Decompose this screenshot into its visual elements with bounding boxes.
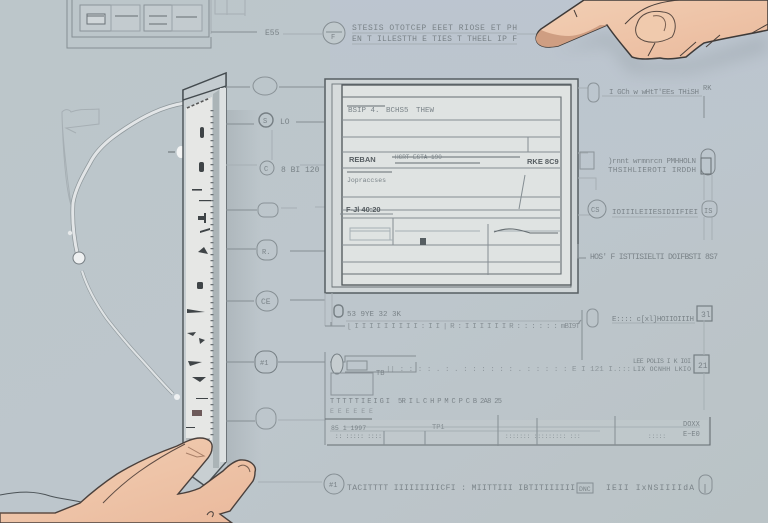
connector callouts between ruler and form: #1 bbox=[260, 360, 268, 368]
connector callouts between ruler and form bbox=[226, 77, 344, 494]
connector callouts between ruler and form: #1 bbox=[329, 482, 337, 490]
right callouts: IS bbox=[704, 208, 712, 216]
panel: top left wireframe bbox=[67, 0, 245, 48]
panel: central form: BCHS5 bbox=[386, 107, 409, 115]
connector callouts between ruler and form: 8 BI 120 bbox=[281, 166, 320, 175]
lower rows: 3l bbox=[701, 311, 711, 320]
connector callouts between ruler and form: CE bbox=[261, 298, 271, 307]
bottom table: E E E E E E bbox=[330, 408, 373, 415]
right callouts: CS bbox=[591, 207, 599, 215]
connector callouts between ruler and form: R. bbox=[262, 249, 270, 257]
curve with nodes bbox=[62, 103, 191, 400]
bottom table: TP1 bbox=[432, 424, 445, 432]
connector callouts between ruler and form: LO bbox=[280, 118, 290, 127]
bottom table bbox=[325, 398, 710, 446]
right callouts bbox=[578, 83, 718, 262]
top callout row bbox=[211, 22, 536, 44]
panel: central form: Jopraccses bbox=[347, 177, 386, 184]
text: TB bbox=[376, 370, 384, 378]
top callout row: F bbox=[331, 34, 335, 42]
ruler bbox=[183, 73, 226, 486]
right callouts: I GCh w wHtT'EEs THiSH bbox=[609, 89, 699, 97]
bottom text row bbox=[347, 475, 712, 494]
right callouts: HOS' F ISTTISIELTI DOIFBSTI 8S7 bbox=[590, 253, 718, 262]
bottom text row: DNC bbox=[579, 486, 591, 493]
right callouts: THSIHLIEROTI IRDDH bbox=[608, 167, 696, 175]
form rows bbox=[342, 97, 560, 274]
bottom text row: TACITTTT IIIIIIIIICFI : MIITTIII IBTITIIIIII bbox=[347, 484, 575, 493]
top callout row: EN T ILLESTTH E TIES T THEEL IP F bbox=[352, 35, 517, 44]
lower rows: 53 9YE 32 3K bbox=[347, 311, 402, 319]
icon: top right hand bbox=[536, 0, 768, 72]
panel: central form: THEW bbox=[416, 107, 435, 115]
bottom table: :: ::::: :::: bbox=[335, 433, 382, 440]
right callouts: RK bbox=[703, 85, 712, 93]
ruler ticks bbox=[210, 110, 214, 440]
bottom table: DOXX bbox=[683, 421, 701, 429]
top callout row: E55 bbox=[265, 29, 280, 38]
panel: central form bbox=[325, 79, 578, 293]
icon: bottom left hand bbox=[0, 438, 255, 523]
bottom table: ::::: bbox=[648, 433, 666, 440]
right callouts: IOIIILEIIESIDIIFIEI bbox=[612, 209, 698, 217]
connector callouts between ruler and form: S bbox=[263, 118, 267, 126]
bottom table: 5R I L C H P M C P C B 2A8 25 bbox=[398, 398, 502, 406]
panel: central form: HCRT ESTA 190 bbox=[395, 154, 442, 161]
text: 21 bbox=[698, 362, 708, 371]
lower rows bbox=[325, 305, 712, 360]
bottom table: E−E0 bbox=[683, 431, 700, 439]
bottom text row: IEII IxNSIIIIdA bbox=[606, 484, 694, 493]
text: || : : : : . : . : : : : : : . : : : : : E I 121 I.::: bbox=[386, 366, 631, 374]
form labels: BSIP 4. bbox=[348, 107, 380, 115]
top callout row: STESIS OTOTCEP EEET RIOSE ET PH bbox=[352, 24, 517, 33]
text: LEE POLIS I K IOI bbox=[633, 358, 691, 365]
lower rows: E:::: c[xl]HOIIOIIIH bbox=[612, 316, 694, 324]
panel: central form: F-Jl 40:20 bbox=[346, 205, 381, 214]
panel: central form: RKE 8C9 bbox=[527, 157, 559, 166]
ruler marks bbox=[186, 127, 211, 428]
lower rows: [ I I I I I I I I I : I I | R : I I I I I I R : : : : : : mBI9T bbox=[347, 323, 580, 331]
panel: central form: REBAN bbox=[349, 155, 376, 164]
text: LIX OCNHH LKIO bbox=[633, 366, 691, 373]
bottom table: TTTTTIEIGI bbox=[330, 398, 390, 406]
bottom table: ::::::: ::::::::: ::: bbox=[505, 433, 581, 440]
right callouts: )rnnt wrmnrcn PMHHOLN bbox=[608, 158, 696, 166]
connector callouts between ruler and form: C bbox=[264, 166, 268, 174]
bottom table: 85 1 1997 bbox=[331, 425, 366, 432]
